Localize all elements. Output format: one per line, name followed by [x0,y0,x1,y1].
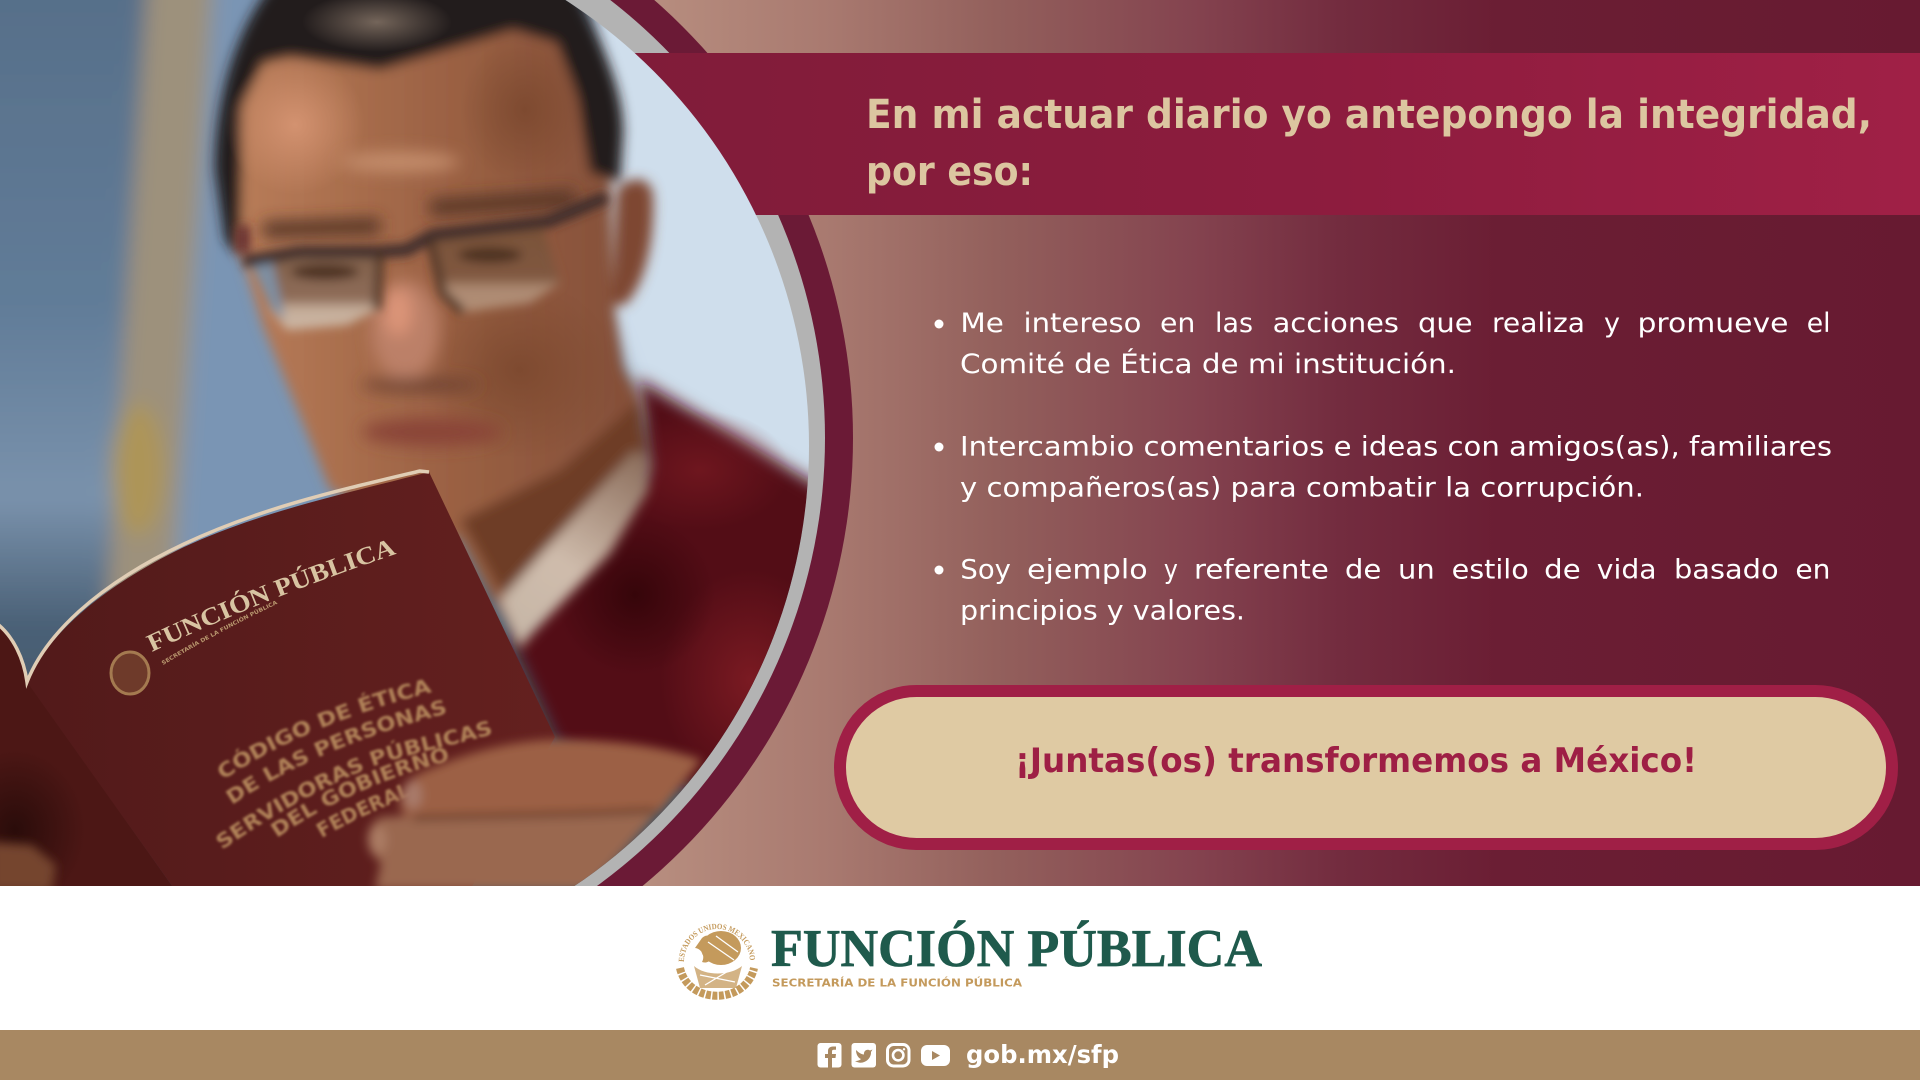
shirt shading [578,415,784,752]
bullet 3: estilo [1452,554,1529,586]
bullet 2: Intercambio comentarios e ideas con amigos(as), familiares [960,432,1832,462]
face details [263,152,575,446]
bullet 1 [934,308,1830,380]
logo wordmark: FUNCIÓN PÚBLICA [771,920,1262,978]
booklet logo seal [111,652,149,694]
bullet 1: en [1160,308,1195,339]
bullet 1: promueve [1638,308,1788,339]
booklet [0,469,555,886]
booklet title: SERVIDORAS PÚBLICAS [215,720,492,850]
photo: man reading the code of ethics booklet [0,0,809,886]
bullet 1: el [1807,308,1830,339]
icon: national seal: ESTADOS UNIDOS MEXICANOS [678,924,755,962]
bullet 1: Comité de Ética de mi institución. [960,348,1456,380]
logo subtitle: SECRETARÍA DE LA FUNCIÓN PÚBLICA [772,976,1023,990]
title text: por eso: [866,149,1033,195]
bullet 1: realiza [1492,308,1585,339]
callout pill [840,691,1892,844]
booklet title: FEDERAL [315,784,406,838]
bullet 1: Me [960,308,1004,339]
bullet 3: y [1164,554,1178,586]
icon: instagram [888,1044,909,1066]
bullet list [934,308,1832,626]
bullet 2 [934,432,1832,504]
booklet subheading: SECRETARÍA DE LA FUNCIÓN PÚBLICA [162,600,278,665]
icon: youtube [921,1045,950,1066]
bullet 1: intereso [1024,308,1142,339]
bullet 1: y [1604,308,1620,339]
icon: facebook [818,1043,842,1068]
blurred background [0,0,809,886]
callout text: ¡Juntas(os) transformemos a México! [1015,741,1697,781]
logo: Función Pública [676,920,1262,1000]
icon: national seal [676,924,758,1000]
bullet 3: de [1345,554,1381,586]
bullet 2: y compañeros(as) para combatir la corrupción. [960,472,1644,504]
title text: En mi actuar diario yo antepongo la integridad, [866,92,1872,138]
face shading [228,0,564,426]
blurred shirt [505,370,808,793]
bullet 3 [934,554,1830,626]
white logo band [0,886,1920,1030]
hands [0,740,702,892]
booklet title: DEL GOBIERNO [270,746,449,838]
icon: twitter [852,1043,876,1068]
bullet 3: referente [1194,554,1329,586]
booklet heading: FUNCIÓN PÚBLICA [145,540,396,652]
footer url: gob.mx/sfp [966,1040,1119,1069]
footer band [0,1030,1920,1080]
bullet 1: que [1418,308,1473,339]
title text [866,92,1872,195]
bullet 1: las [1215,308,1253,339]
blurred head and neck [215,0,653,650]
decorative circle rings [566,0,853,886]
bullet 3: principios y valores. [960,596,1245,626]
bullet 3: Soy [960,554,1011,586]
bullet 3: en [1795,554,1830,586]
booklet title: CÓDIGO DE ÉTICA [217,678,433,778]
bullet 3: ejemplo [1027,554,1148,586]
bullet 3: un [1398,554,1435,586]
bullet 1: acciones [1273,308,1399,339]
bullet 3: vida [1597,554,1656,586]
bullet 3: basado [1674,554,1779,586]
bullet 3: de [1544,554,1581,586]
booklet title: DE LAS PERSONAS [224,698,447,805]
glasses [236,197,607,330]
title banner [560,53,1920,215]
